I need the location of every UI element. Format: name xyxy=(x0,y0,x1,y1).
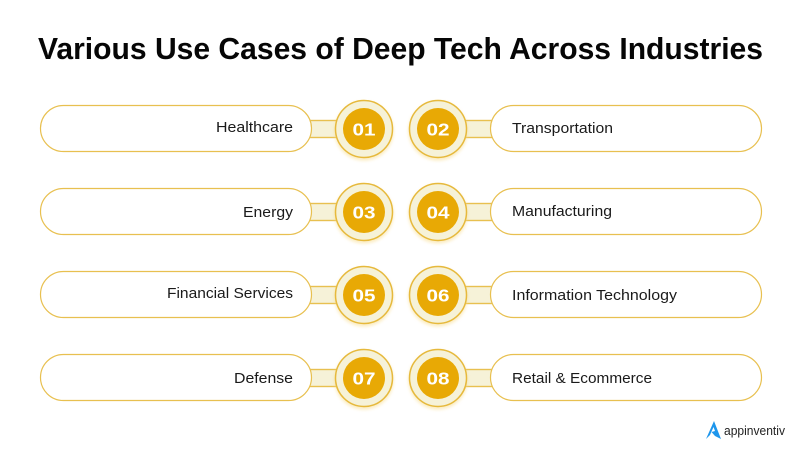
item 08: Retail & Ecommerce xyxy=(408,350,762,410)
item 01: Healthcare: Healthcare xyxy=(216,119,293,136)
item 06: Information Technology: Information Technology xyxy=(512,287,678,304)
title: Various Use Cases of Deep Tech Across Industries xyxy=(38,31,763,66)
logo: appinventiv: appinventiv xyxy=(724,424,786,438)
item 02: Transportation xyxy=(408,100,762,160)
item 03: Energy: 03 xyxy=(352,202,376,222)
item 03: Energy: Energy xyxy=(243,204,294,221)
item 08: Retail & Ecommerce: 08 xyxy=(426,368,450,388)
logo: appinventiv xyxy=(706,421,786,439)
item 07: Defense: Defense xyxy=(234,370,293,387)
item 04: Manufacturing xyxy=(408,184,762,244)
item 04: Manufacturing: 04 xyxy=(426,202,450,222)
item 06: Information Technology xyxy=(408,266,762,326)
item 05: Financial Services: 05 xyxy=(352,286,376,306)
item 08: Retail & Ecommerce: Retail & Ecommerce xyxy=(512,370,652,387)
item 01: Healthcare: 01 xyxy=(352,120,376,140)
item 07: Defense: 07 xyxy=(352,368,376,388)
item 05: Financial Services: Financial Services xyxy=(167,285,293,302)
item 06: Information Technology: 06 xyxy=(426,286,450,306)
item 03: Energy xyxy=(40,184,394,244)
item 02: Transportation: 02 xyxy=(426,120,450,140)
item 02: Transportation: Transportation xyxy=(512,120,613,137)
item 07: Defense xyxy=(40,350,394,410)
item 01: Healthcare xyxy=(40,100,394,160)
item 05: Financial Services xyxy=(40,266,394,326)
item 04: Manufacturing: Manufacturing xyxy=(512,203,612,220)
